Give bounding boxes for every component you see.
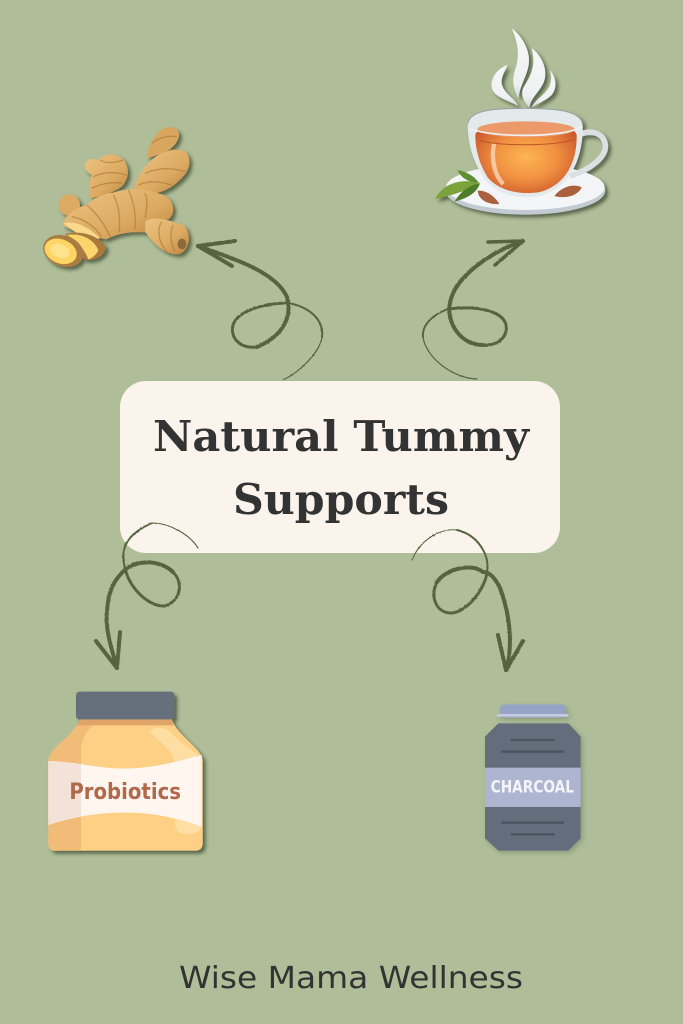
arrow: to ginger [198,241,322,380]
icon: charcoal bottle [485,704,581,851]
icon: probiotics jar [48,692,203,851]
icon: cup of tea [435,28,605,215]
arrow: to probiotics [96,523,198,668]
label text: CHARCOAL [491,778,574,797]
panel: title card [120,381,560,553]
icon: tea leaves [435,170,480,202]
icon: glass cup [468,108,583,197]
arrow: to tea [423,241,523,379]
arrow: to charcoal [412,530,523,670]
icon: steam [492,28,555,107]
icon: ginger root [39,127,190,272]
icon: saucer [445,167,605,215]
heading: Natural Tummy Supports: Supports [233,475,449,524]
footer: brand name: Wise Mama Wellness [179,961,523,996]
icon: cup handle [570,132,605,176]
heading: Natural Tummy Supports: Natural Tummy [153,412,531,461]
label text: Probiotics [69,780,181,805]
icon: almonds [478,186,582,204]
